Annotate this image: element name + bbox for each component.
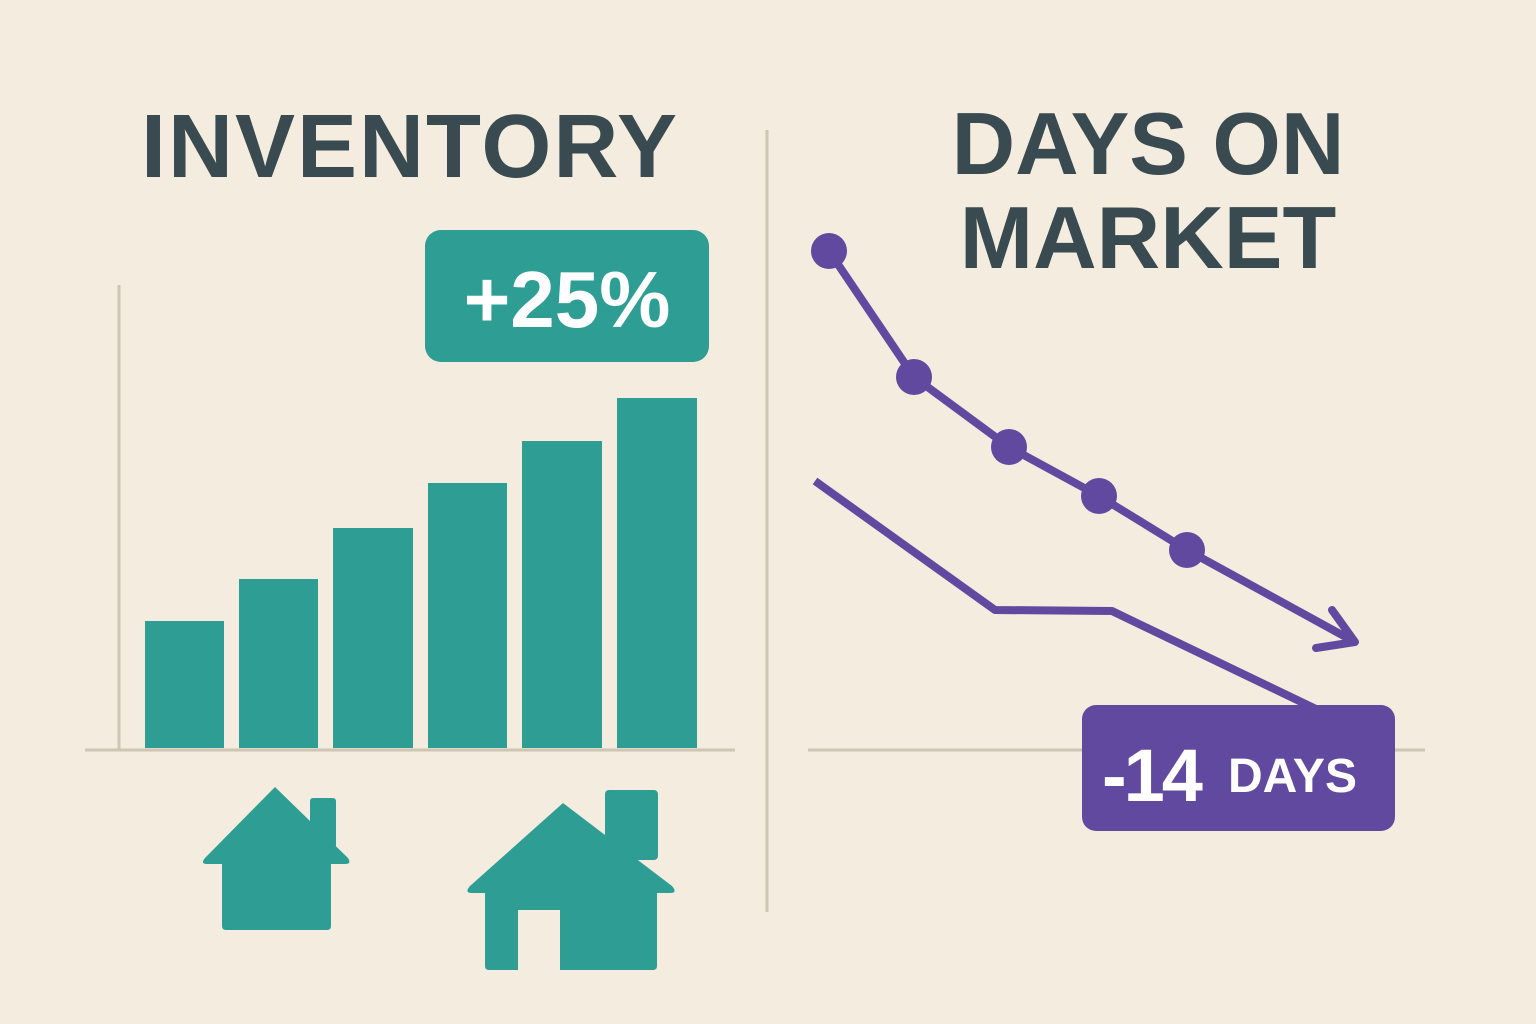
badge: +25% [425, 230, 709, 362]
title: days on market: DAYS ON [952, 94, 1344, 193]
badge: -14 days [1082, 705, 1395, 831]
badge: -14 days: -14 [1102, 734, 1203, 817]
badge: +25%: +25% [464, 255, 670, 344]
title: days on market: MARKET [960, 188, 1336, 287]
icon: large house [467, 790, 675, 970]
title: days on market [952, 94, 1344, 287]
icon: small house [203, 787, 349, 930]
line chart: days on market [808, 233, 1425, 750]
badge: -14 days: DAYS [1228, 750, 1357, 803]
title: inventory: INVENTORY [141, 97, 679, 197]
bar chart: inventory [85, 285, 735, 750]
